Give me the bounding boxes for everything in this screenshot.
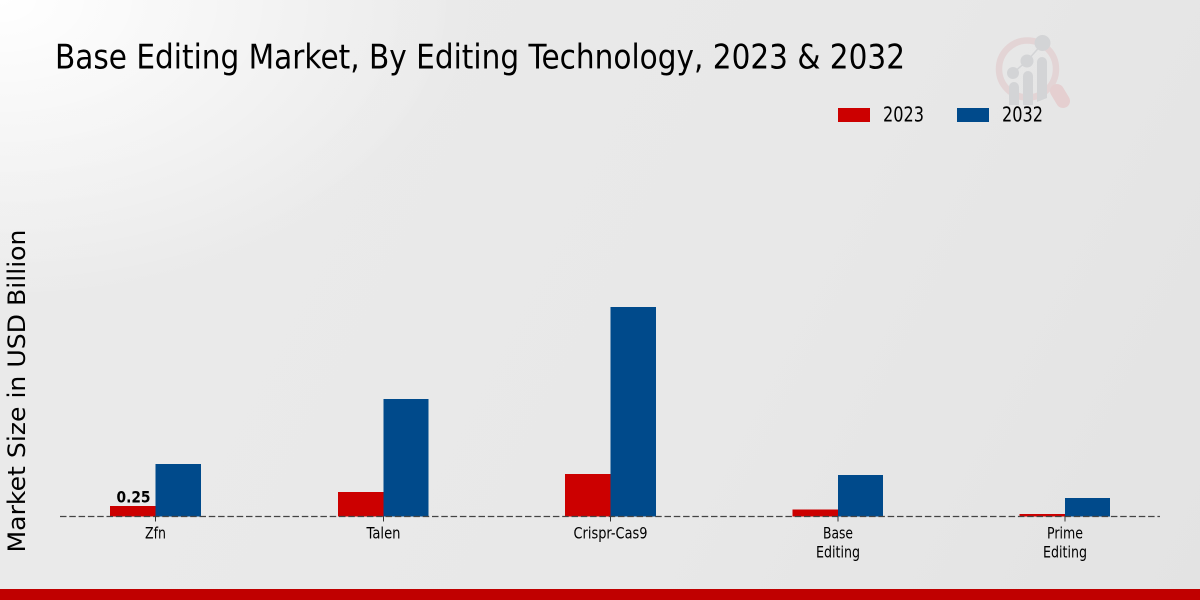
label: Base Editing: Base (823, 524, 853, 542)
legend (838, 102, 1043, 126)
title: Base Editing Market, By Editing Technology, 2023 & 2032 (55, 38, 905, 78)
axis baseline (60, 516, 1160, 518)
label: Talen: Talen (366, 524, 400, 542)
category labels (145, 524, 1087, 562)
label: Prime Editing: Prime (1047, 524, 1083, 542)
legend: 2032 (957, 102, 1043, 126)
label: Base Editing (816, 524, 860, 562)
label: Base Editing: Editing (816, 542, 860, 562)
axis ticks (156, 516, 1065, 522)
data label: 0.25: 0.25 (116, 488, 150, 506)
legend: 2023: 2023 (883, 102, 924, 126)
label: Crispr-Cas9: Crispr-Cas9 (574, 524, 648, 542)
label: Prime Editing: Editing (1043, 542, 1087, 562)
group: Zfn (110, 464, 201, 516)
legend: 2032: 2032 (1002, 102, 1043, 126)
label: Zfn: Zfn (145, 524, 166, 542)
y axis label: Market Size in USD Billion (3, 230, 31, 552)
bottom red band (0, 589, 1200, 600)
label: Prime Editing (1043, 524, 1087, 562)
icon: magnifier logo watermark (999, 35, 1063, 105)
group: Base Editing (792, 475, 883, 516)
group: Talen (338, 399, 428, 516)
group: Crispr-Cas9 (565, 307, 656, 516)
group: Prime Editing (1020, 498, 1110, 516)
bar chart (60, 307, 1160, 522)
legend: 2023 (838, 102, 924, 126)
